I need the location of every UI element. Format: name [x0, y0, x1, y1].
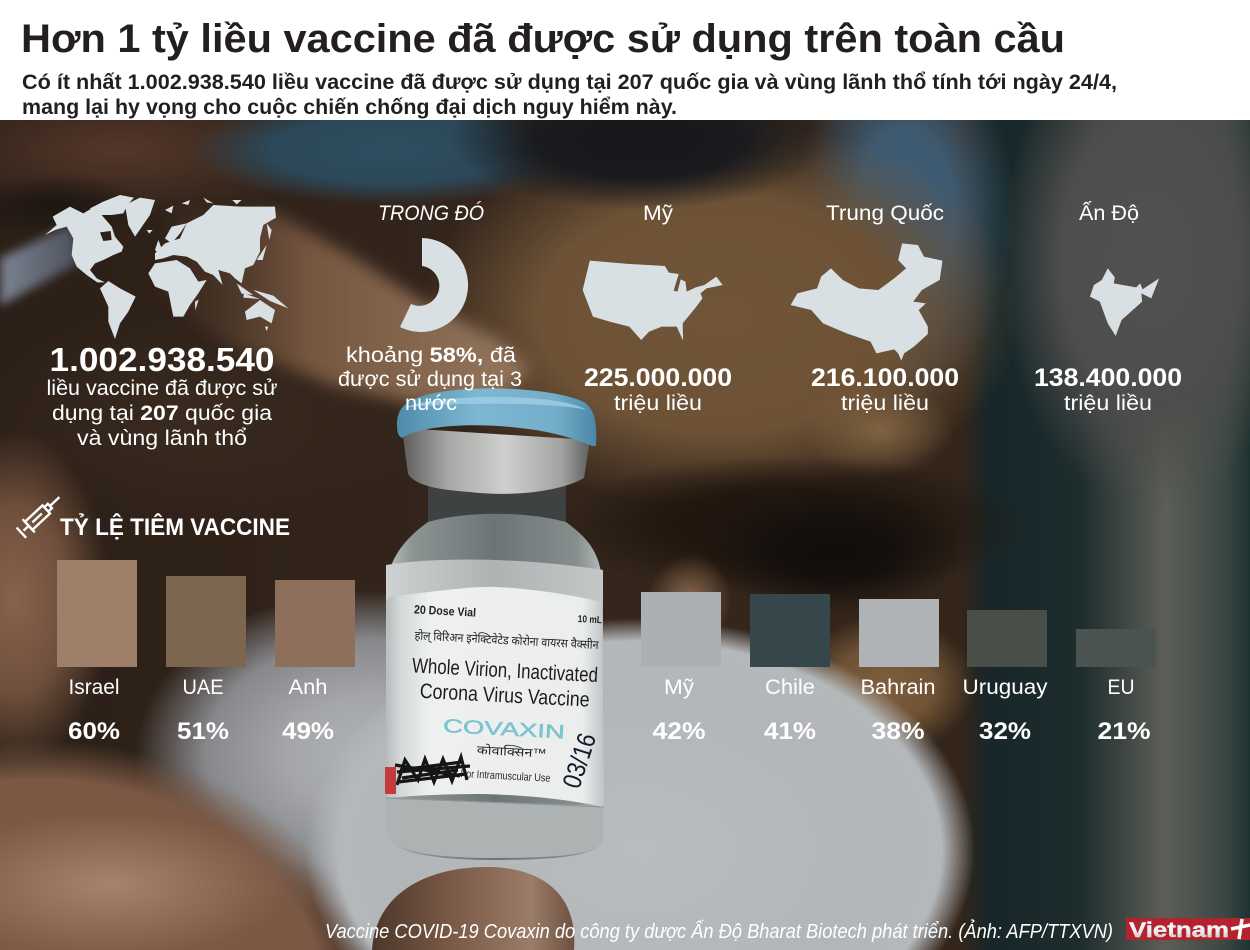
total doses description: liều vaccine đã được sử: [46, 377, 278, 400]
bar: UAE: [166, 576, 246, 745]
country name: Mỹ: [643, 202, 674, 225]
heading: trong do: TRONG ĐÓ: [378, 202, 484, 225]
label small print: COVAXIN: [442, 716, 565, 743]
label small print: [405, 602, 602, 787]
blue cap: [397, 388, 596, 446]
title: Hơn 1 tỷ liều vaccine đã được sử dụng trên toàn cầu: [21, 17, 1065, 61]
red mark: [385, 767, 396, 794]
doses number: 138.400.000: [1034, 364, 1182, 392]
label small print: 10 mL: [578, 614, 602, 626]
panel: global total: [45, 195, 288, 450]
bar: Bahrain: Bahrain: [860, 676, 936, 699]
bar: EU: [1076, 629, 1156, 745]
label small print: Whole Virion, Inactivated: [412, 654, 598, 687]
subtitle: [22, 71, 1117, 119]
country name: Trung Quốc: [826, 202, 944, 225]
heading: vaccination rate: TỶ LỆ TIÊM VACCINE: [60, 512, 290, 541]
bar: Chile: [750, 594, 830, 745]
logo: Vietnam+: [1126, 918, 1250, 942]
bar: My: 42%: [652, 718, 706, 745]
bar: UAE: 51%: [177, 718, 229, 745]
bar: My: [641, 592, 721, 745]
bar: Anh: Anh: [288, 676, 328, 699]
subtitle: Có ít nhất 1.002.938.540 liều vaccine đã được sử dụng tại 207 quốc gia và vùng lãnh thổ tính tới ngày 24/4,: [22, 71, 1117, 94]
bar: Bahrain: 38%: [872, 718, 924, 745]
bar: EU: EU: [1108, 676, 1134, 699]
dark vial neck: [428, 480, 566, 522]
total doses description: và vùng lãnh thổ: [77, 427, 247, 450]
bar: EU: 21%: [1098, 718, 1150, 745]
bar: Chile: Chile: [765, 676, 815, 699]
label small print: होल् विरिअन इनेक्टिवेटेड कोरोना वायरस वैक्सीन: [414, 628, 599, 653]
vial label: [385, 587, 604, 807]
bar: Bahrain: [859, 599, 939, 745]
icon: world map: [45, 195, 288, 339]
fingertip under the vial: [372, 867, 574, 950]
icon: syringe: [15, 491, 66, 539]
photo caption: Vaccine COVID-19 Covaxin do công ty dược Ấn Độ Bharat Biotech phát triển. (Ảnh: AFP/TTXVN): [325, 919, 1113, 943]
unit: triệu liều: [1064, 392, 1152, 415]
bar: Uruguay: 32%: [979, 718, 1031, 745]
label small print: For Intramuscular Use: [460, 768, 551, 785]
bar: Chile: 41%: [764, 718, 816, 745]
bar chart: vaccination rate: [57, 560, 1156, 745]
handwritten batch number: 03/16: [556, 729, 602, 792]
unit: triệu liều: [841, 392, 929, 415]
bar: UAE: UAE: [182, 676, 224, 699]
liquid below the label: [386, 798, 603, 858]
share description: được sử dụng tại 3: [338, 368, 522, 391]
donut chart: [400, 238, 468, 332]
bar: Israel: Israel: [68, 676, 120, 699]
subtitle: mang lại hy vọng cho cuộc chiến chống đại dịch nguy hiểm này.: [22, 96, 677, 119]
doses number: 216.100.000: [811, 364, 959, 392]
bar: Anh: [275, 580, 355, 745]
icon: USA map: [583, 261, 723, 341]
unit: triệu liều: [614, 392, 702, 415]
white header band: [0, 0, 1250, 120]
pen scribble: [395, 757, 470, 785]
cap top highlight: [405, 397, 586, 410]
icon: China map: [791, 243, 942, 361]
panel: 58 percent share: [338, 202, 522, 415]
doses number: 225.000.000: [584, 364, 732, 392]
bar: Anh: 49%: [282, 718, 334, 745]
bar: My: Mỹ: [664, 676, 695, 699]
share description: [338, 344, 522, 415]
bar: Israel: 60%: [68, 718, 120, 745]
total doses description: dụng tại 207 quốc gia: [52, 402, 272, 425]
country name: Ấn Độ: [1079, 202, 1139, 225]
silver crimp: [402, 428, 590, 494]
total doses number: 1.002.938.540: [50, 341, 274, 378]
total doses description: [46, 377, 278, 450]
panel: India: [1034, 202, 1182, 415]
vial neck and shoulder glass: [386, 490, 603, 860]
share description: khoảng 58%, đã: [346, 344, 516, 367]
vial photo subject: [385, 388, 604, 860]
share description: nước: [405, 392, 457, 415]
label small print: कोवाक्सिन™: [476, 743, 547, 761]
bar: Uruguay: Uruguay: [962, 676, 1048, 699]
label small print: Corona Virus Vaccine: [419, 680, 590, 712]
bar: Israel: [57, 560, 137, 745]
liquid meniscus: [386, 560, 603, 605]
logo: Vietnam+: Vietnam: [1129, 919, 1229, 942]
panel: China: [791, 202, 959, 415]
label small print: 20 Dose Vial: [414, 602, 476, 620]
bar: Uruguay: [962, 610, 1048, 745]
icon: India map: [1090, 268, 1159, 336]
blurred finger: [0, 212, 530, 405]
panel: United States: [583, 202, 732, 415]
